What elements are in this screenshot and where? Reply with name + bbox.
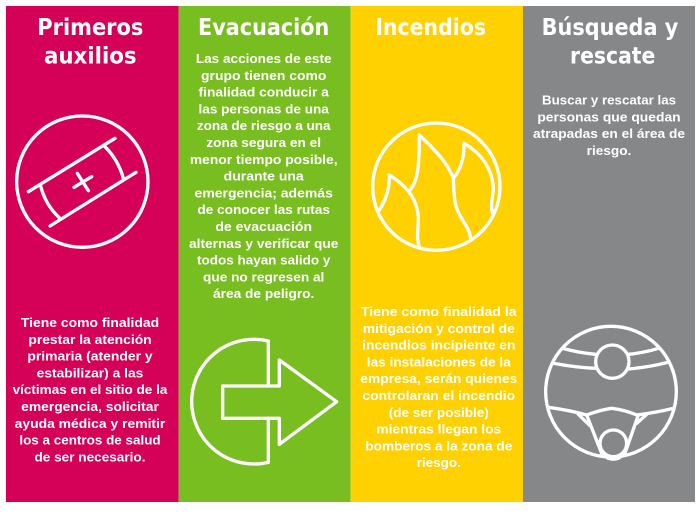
text: búsqueda y rescate description: Buscar y rescatar las	[542, 92, 676, 108]
text: incendios description: controlaran el incendio	[362, 388, 515, 403]
text: evacuación description: menor tiempo posible,	[190, 152, 338, 167]
text: primeros auxilios description: primaria (atender y	[27, 349, 153, 364]
panel: evacuación	[179, 6, 351, 502]
text: incendios description: incendios incipiente en	[362, 338, 516, 353]
text: evacuación description	[189, 51, 338, 301]
panel: búsqueda y rescate	[523, 6, 695, 502]
text: evacuación description: finalidad conducir a	[199, 85, 330, 100]
heading: búsqueda y rescate: Búsqueda y	[542, 15, 678, 41]
text: primeros auxilios description: ayuda médica y remitir	[15, 416, 165, 431]
text: evacuación description: durante una	[224, 169, 305, 184]
text: primeros auxilios description: de ser necesario.	[34, 449, 146, 464]
text: evacuación description: zona de riesgo a una	[197, 118, 331, 133]
text: búsqueda y rescate description: personas que quedan	[537, 109, 681, 124]
icon: exit arrow	[192, 339, 337, 464]
text: evacuación description: área de peligro.	[213, 286, 314, 301]
text: búsqueda y rescate description: riesgo.	[587, 143, 631, 158]
heading: primeros auxilios	[37, 15, 143, 70]
heading: incendios: Incendios	[375, 15, 486, 41]
heading: búsqueda y rescate	[542, 15, 678, 70]
text: incendios description: las instalaciones de la	[367, 354, 512, 369]
text: evacuación description: que no regresen al	[203, 269, 324, 284]
text: evacuación description: todos hayan salido y	[197, 253, 331, 268]
text: primeros auxilios description: estabilizar) a las	[37, 365, 143, 380]
text: primeros auxilios description: víctimas en el sitio de la	[13, 382, 168, 397]
text: incendios description: riesgo.	[417, 455, 461, 470]
text: primeros auxilios description	[13, 315, 168, 464]
text: incendios description: mientras llegan los	[376, 422, 501, 437]
text: evacuación description: emergencia; además	[195, 185, 333, 200]
text: evacuación description: grupo tienen como	[201, 68, 326, 83]
text: incendios description: mitigación y control de	[363, 321, 515, 336]
icon: stretcher	[17, 116, 148, 247]
text: primeros auxilios description: prestar la atención	[28, 332, 152, 347]
text: evacuación description: zona segura en el	[206, 135, 321, 150]
text: incendios description: empresa, serán quienes	[360, 371, 517, 386]
text: búsqueda y rescate description: atrapadas en el área de	[533, 126, 685, 141]
heading: primeros auxilios: auxilios	[44, 44, 137, 70]
text: evacuación description: de evacuación	[215, 219, 312, 234]
panel: incendios	[351, 6, 523, 502]
text: primeros auxilios description: emergencia, solicitar	[21, 399, 159, 414]
heading: búsqueda y rescate: rescate	[570, 44, 655, 70]
text: primeros auxilios description: los a centros de salud	[19, 433, 161, 448]
heading: evacuación: Evacuación	[198, 15, 329, 41]
text: evacuación description: de conocer las rutas	[197, 202, 330, 217]
icon: rescue person	[546, 326, 676, 459]
heading: primeros auxilios: Primeros	[37, 15, 143, 41]
text: evacuación description: Las acciones de este	[196, 51, 332, 66]
panel: primeros auxilios	[6, 6, 179, 502]
text: búsqueda y rescate description	[533, 92, 685, 158]
icon: flames	[373, 123, 500, 250]
text: incendios description: Tiene como finalidad la	[361, 304, 517, 319]
text: incendios description: bomberos a la zona de	[365, 438, 512, 453]
text: incendios description: (de ser posible)	[389, 405, 489, 420]
text: evacuación description: alternas y verificar que	[189, 236, 338, 251]
text: incendios description	[360, 304, 517, 470]
text: evacuación description: las personas de una	[199, 101, 330, 116]
text: primeros auxilios description: Tiene como finalidad	[21, 315, 159, 330]
